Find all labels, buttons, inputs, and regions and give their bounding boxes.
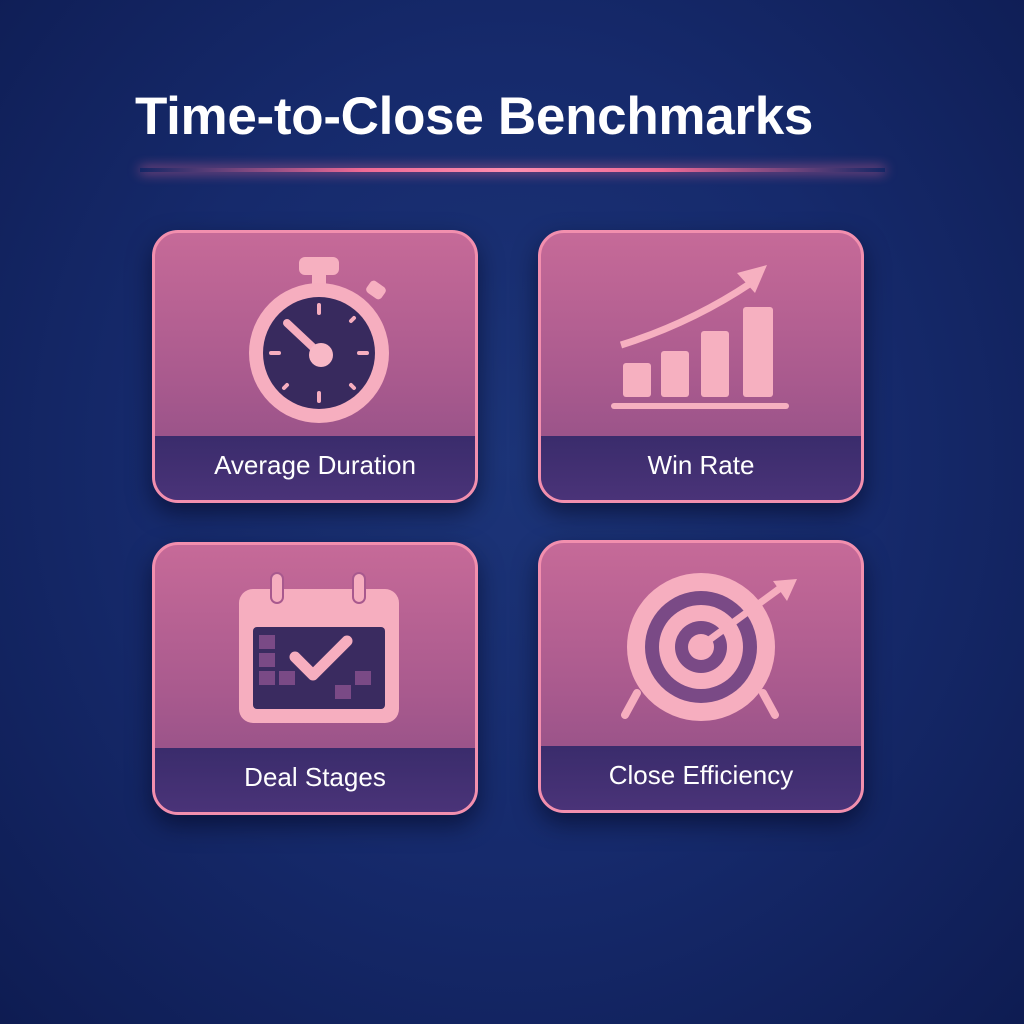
panel: close efficiency <box>538 540 864 813</box>
label band: Deal Stages <box>244 762 386 792</box>
icon: stopwatch <box>249 257 389 423</box>
panel: deal stages <box>152 542 478 815</box>
icon: bar chart with arrow <box>611 265 789 409</box>
label band <box>541 436 861 500</box>
glowing underline <box>140 168 885 172</box>
label band: Close Efficiency <box>609 760 793 790</box>
panel: win rate <box>538 230 864 503</box>
title: Time-to-Close Benchmarks <box>135 87 813 146</box>
label band <box>155 748 475 812</box>
icon: target with arrow <box>621 573 797 721</box>
label band <box>155 436 475 500</box>
icon: calendar with check <box>239 572 399 723</box>
label band <box>541 746 861 810</box>
panel: average duration <box>152 230 478 503</box>
label band: Win Rate <box>648 450 754 480</box>
label band: Average Duration <box>214 450 416 480</box>
